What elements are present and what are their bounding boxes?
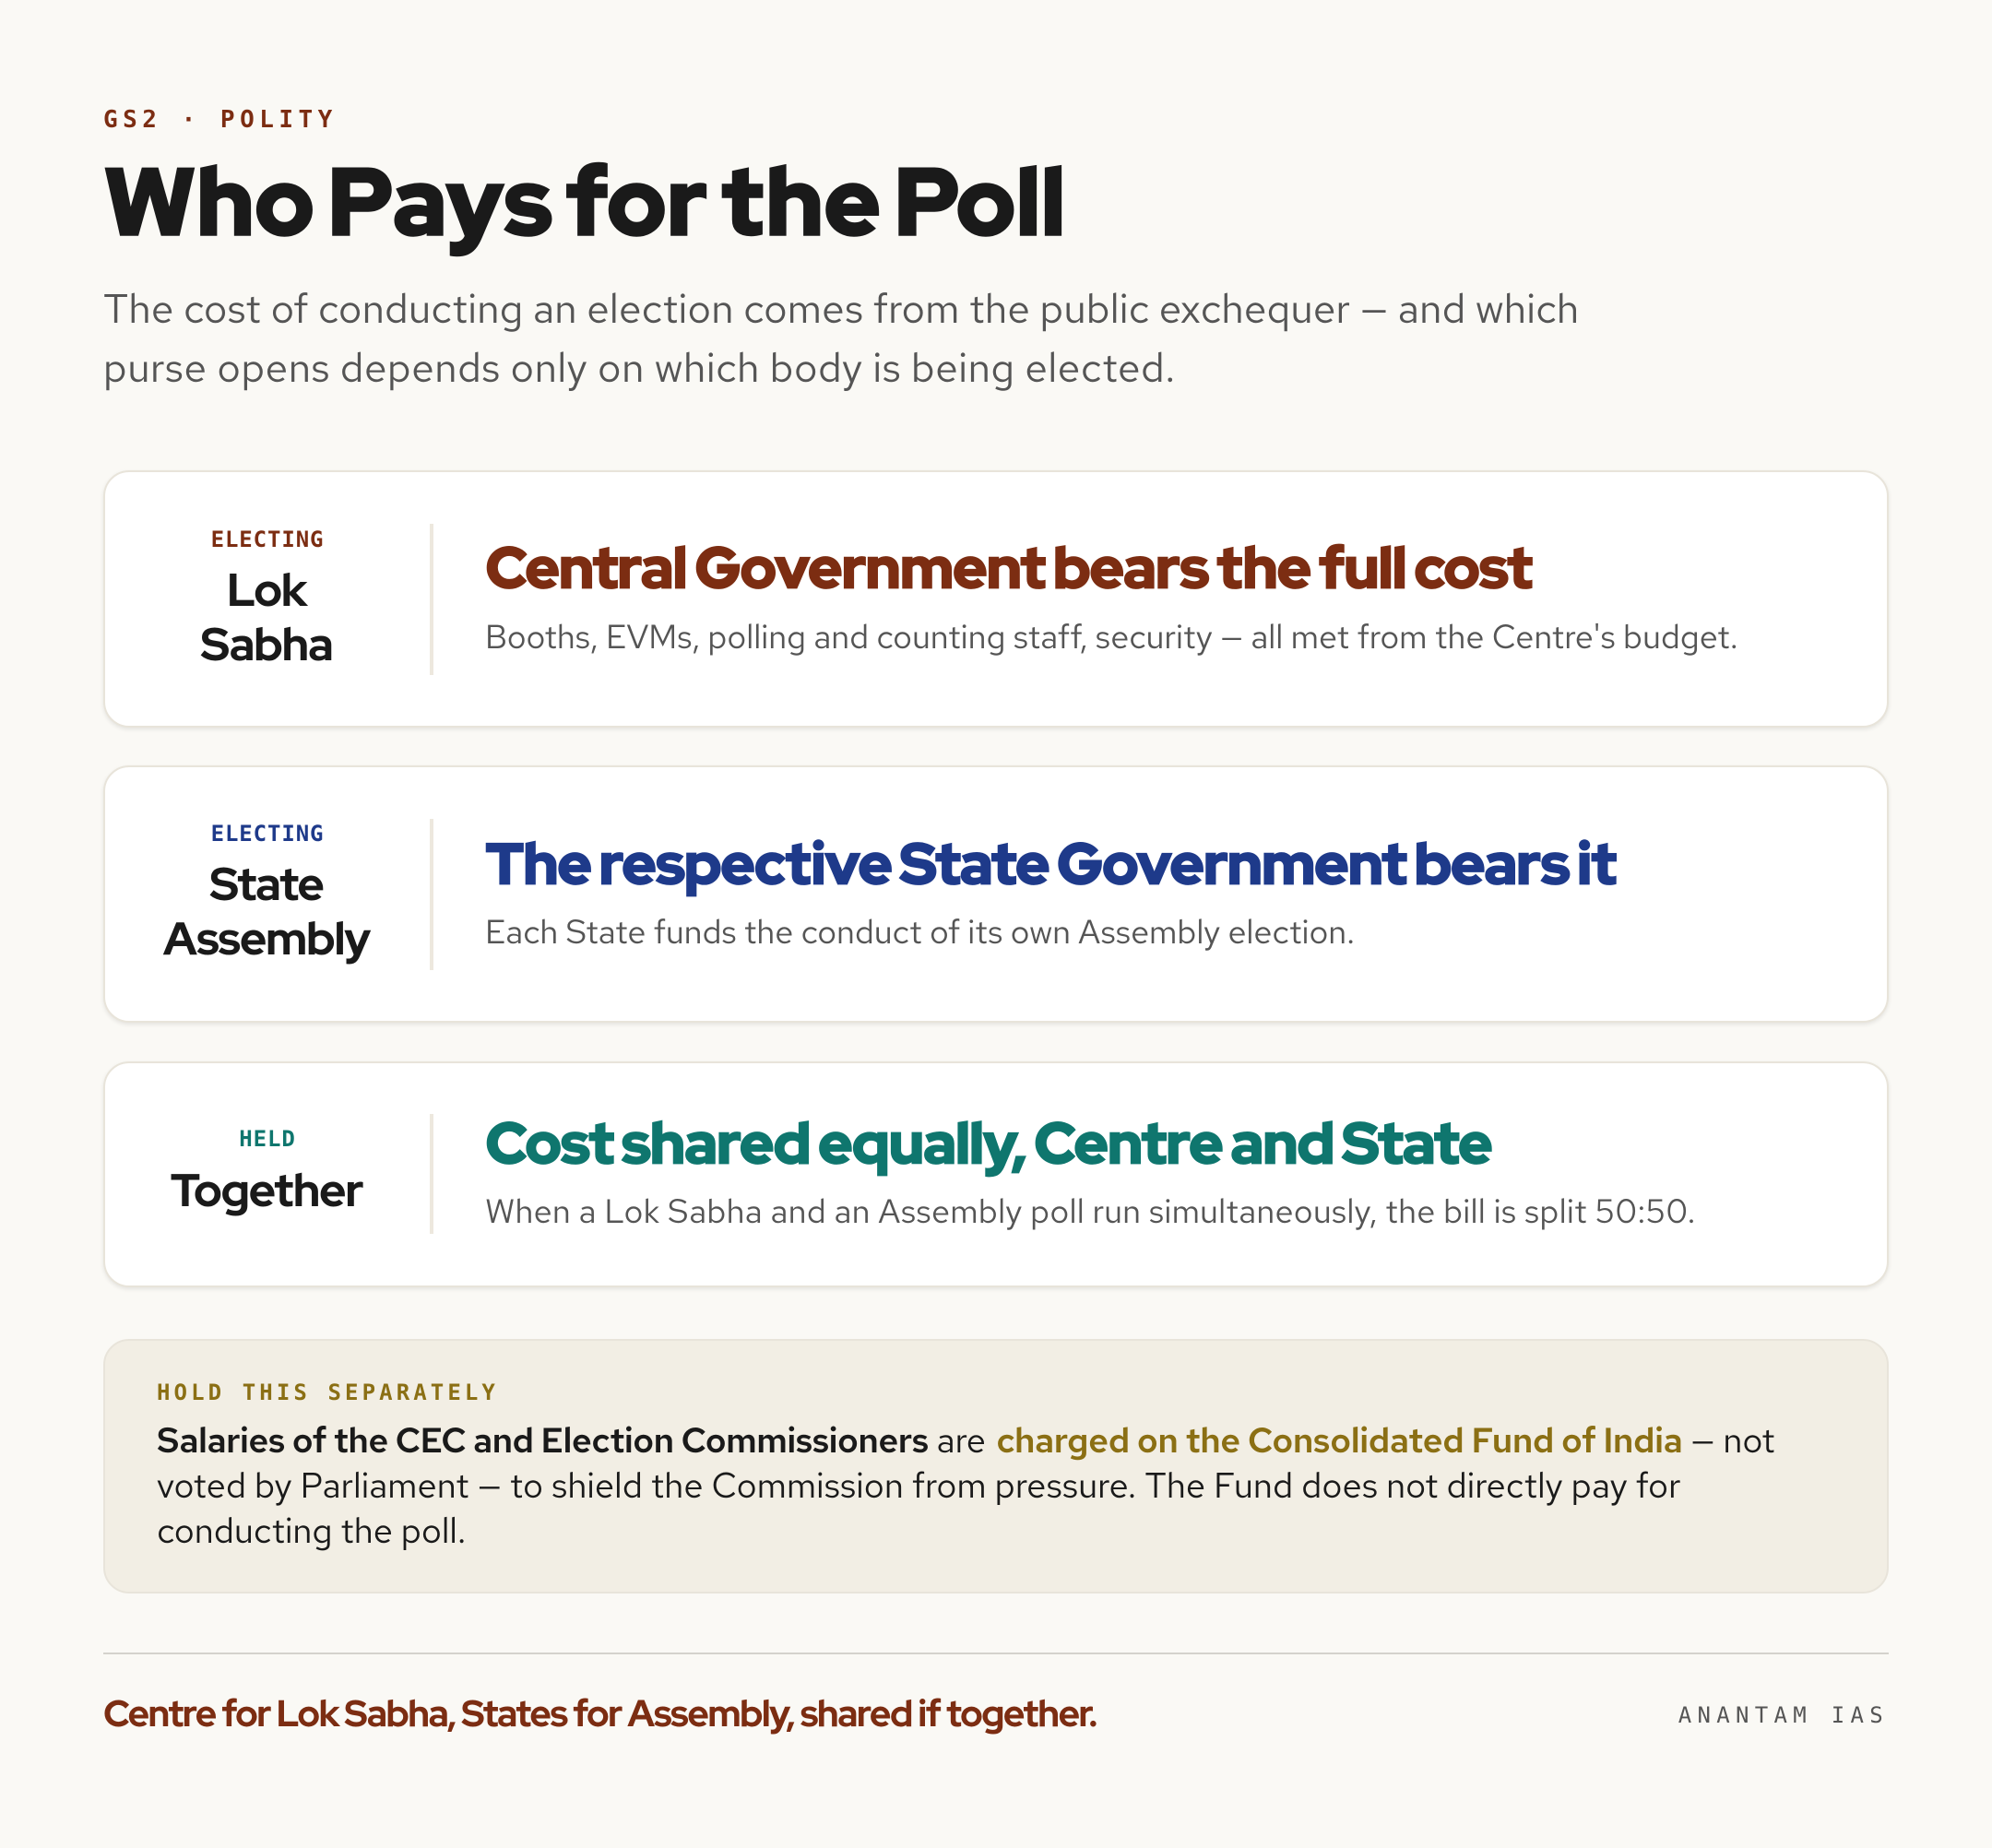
name: Lok Sabha	[201, 560, 332, 675]
name: State Assembly: Assembly	[163, 908, 370, 969]
heading: central: Central Government bears the full cost	[485, 528, 1532, 607]
panel: Together	[103, 1061, 1889, 1287]
name: State Assembly: State	[209, 854, 324, 915]
label: held: HELD	[239, 1126, 296, 1152]
heading: state: The respective State Government bears it	[485, 824, 1616, 903]
name: Together: Together	[171, 1160, 362, 1221]
panel: Lok Sabha	[103, 470, 1889, 728]
name: State Assembly	[162, 854, 371, 969]
subtitle: purse opens depends only on which body is being elected.	[103, 341, 1176, 395]
description: together: When a Lok Sabha and an Assembly poll run simultaneously, the bill is split 50:50.	[485, 1189, 1696, 1233]
panel: note	[103, 1339, 1889, 1593]
footer brand: ANANTAM IAS	[1678, 1702, 1889, 1728]
eyebrow: GS2 · POLITY	[103, 106, 338, 134]
note label: HOLD THIS SEPARATELY	[157, 1380, 499, 1405]
description: state: Each State funds the conduct of its own Assembly election.	[485, 909, 1355, 954]
label: electing: ELECTING	[211, 821, 324, 847]
note text: voted by Parliament — to shield the Commission from pressure. The Fund does not directly pay for	[157, 1462, 1681, 1509]
description: central: Booths, EVMs, polling and counting staff, security — all met from the Centre's budget.	[485, 614, 1738, 658]
title: Who Pays for the Poll	[103, 137, 1065, 265]
note text	[157, 1416, 1775, 1554]
subtitle: The cost of conducting an election comes from the public exchequer — and which	[103, 282, 1579, 336]
footer takeaway: Centre for Lok Sabha, States for Assembly, shared if together.	[103, 1689, 1097, 1738]
subtitle	[103, 282, 1579, 395]
name: Lok Sabha: Sabha	[201, 614, 332, 675]
name: Lok Sabha: Lok	[227, 560, 306, 621]
panel: State Assembly	[103, 765, 1889, 1023]
note text: Salaries of the CEC and Election Commissioners are charged on the Consolidated Fund of India — not	[157, 1416, 1775, 1463]
note text: conducting the poll.	[157, 1507, 466, 1554]
heading: together: Cost shared equally, Centre and State	[485, 1104, 1491, 1182]
label: electing: ELECTING	[211, 527, 324, 552]
